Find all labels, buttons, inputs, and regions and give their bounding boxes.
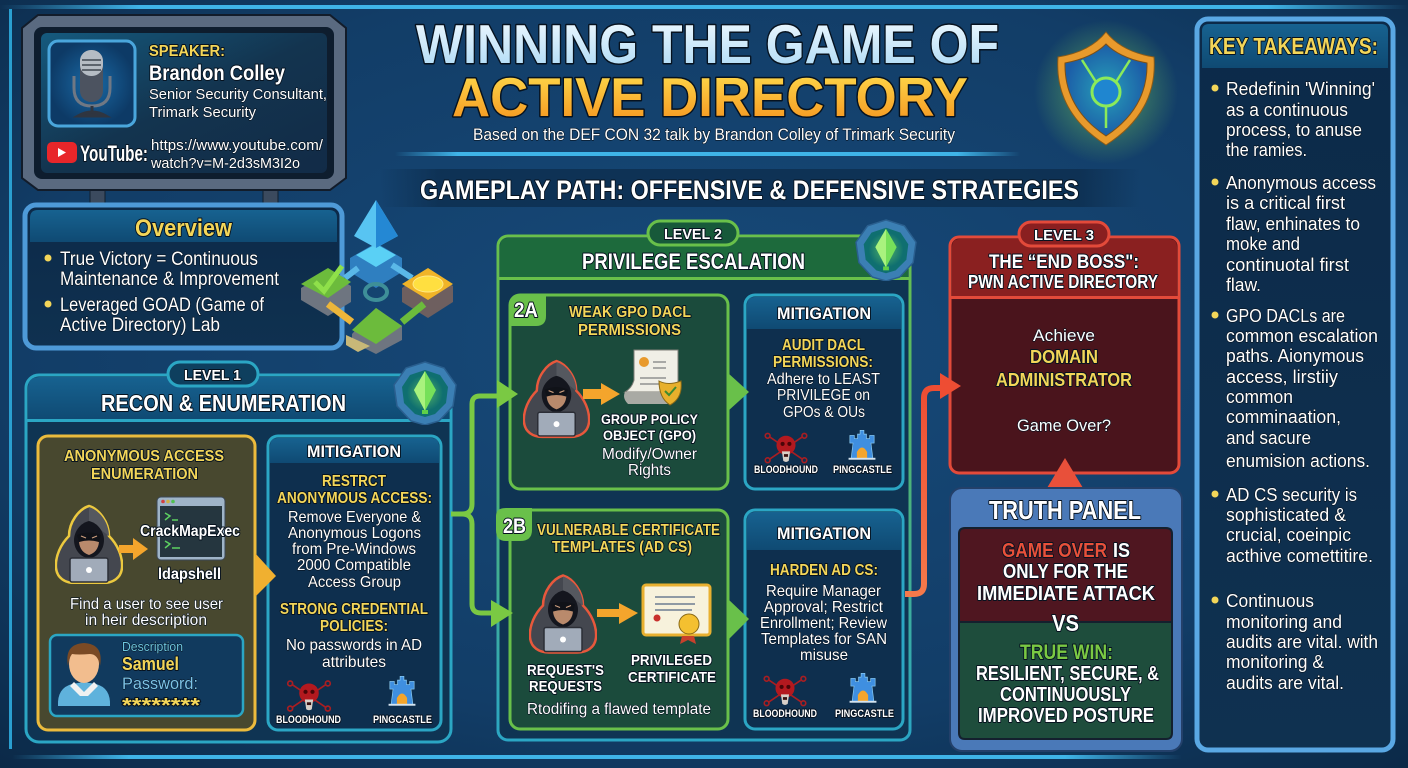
takeaway 2: is a critical first	[1226, 193, 1345, 213]
label: requests	[527, 662, 604, 695]
takeaway 3: common escalation	[1226, 326, 1378, 346]
user card	[50, 635, 243, 717]
card title	[569, 304, 691, 339]
panel: level 3	[950, 222, 1179, 473]
mitigation: harden AD CS	[760, 562, 887, 664]
title: ACTIVE DIRECTORY	[452, 66, 968, 128]
mitigation: audit DACL: PERMISSIONS:	[773, 354, 873, 371]
icon: level 2 badge	[856, 220, 916, 281]
mitigation: restrict access: Anonymous Logons	[288, 525, 421, 542]
takeaway 4: crucial, coeinpic	[1226, 525, 1351, 545]
card: 2A weak GPO DACL	[510, 294, 728, 489]
truth: game over	[959, 528, 1172, 622]
icon: hacker	[56, 506, 122, 583]
mitigation: audit DACL: GPOs & OUs	[783, 404, 865, 421]
panel: level 1	[26, 362, 456, 742]
takeaway 4: sophisticated &	[1226, 505, 1346, 525]
overview bullets: Active Directory) Lab	[60, 315, 220, 336]
youtube url	[150, 137, 324, 172]
level 2 heading: PRIVILEGE ESCALATION	[582, 249, 805, 274]
overview bullets: Leveraged GOAD (Game of	[60, 295, 265, 316]
label: VS: VS	[1052, 610, 1079, 636]
takeaway 3: enumision actions.	[1226, 451, 1370, 471]
icon: bloodhound	[753, 676, 817, 720]
takeaway 5: audits are vital.	[1226, 673, 1344, 693]
icon: pingcastle	[833, 430, 892, 476]
icon: shield	[1034, 20, 1178, 164]
arrow: attack to mitigation	[255, 553, 276, 597]
mitigation: restrict access: Remove Everyone &	[288, 509, 421, 526]
mitigation: credential policies: STRONG CREDENTIAL	[280, 601, 428, 618]
caption: flawed template: Rtodifing a flawed template	[527, 701, 711, 718]
level 3 goal: Achieve	[1033, 326, 1095, 345]
tool label: crackmapexec: CrackMapExec	[140, 523, 240, 540]
level 3 heading: PWN ACTIVE DIRECTORY	[968, 272, 1158, 292]
label: requests: REQUESTS	[529, 678, 602, 695]
arrow: 2A to mitigation	[728, 373, 749, 411]
takeaway 2: Anonymous access	[1226, 173, 1376, 193]
icon: bloodhound	[754, 433, 818, 476]
mitigation: credential policies: No passwords in AD	[286, 637, 422, 654]
heading: key takeaways: KEY TAKEAWAYS:	[1209, 33, 1378, 59]
GPO label: GROUP POLICY	[601, 411, 699, 427]
mitigation: harden AD CS: misuse	[800, 647, 848, 664]
card title: ANONYMOUS ACCESS	[64, 448, 224, 465]
mitigation: credential policies	[280, 601, 428, 671]
tab: 2A: 2A	[514, 299, 538, 322]
takeaway 2: continuotal first	[1226, 255, 1349, 275]
takeaway 1	[1212, 79, 1375, 160]
user card: ********	[122, 695, 200, 717]
overview bullets: True Victory = Continuous	[60, 249, 258, 270]
icon: user	[58, 643, 110, 706]
label: privileged certificate	[628, 652, 716, 686]
icon: GPO scroll	[624, 350, 681, 405]
overview bullets	[44, 249, 280, 336]
takeaway 3: GPO DACLs are	[1226, 306, 1345, 326]
takeaway 3: common	[1226, 387, 1293, 407]
user card: Description	[122, 639, 183, 654]
icon: youtube	[47, 141, 148, 166]
level 3 heading	[968, 252, 1158, 292]
truth: true win: IMPROVED POSTURE	[978, 705, 1154, 727]
mitigation: audit DACL: Adhere to LEAST	[767, 371, 880, 388]
GPO label: Modify/Owner	[602, 446, 698, 463]
mitigation: restrict access: ANONYMOUS ACCESS:	[277, 490, 432, 507]
GPO label: OBJECT (GPO)	[603, 427, 696, 443]
level 2 pill: LEVEL 2	[664, 226, 722, 243]
takeaway 3: access, lirstiiy	[1226, 367, 1338, 387]
youtube url: https://www.youtube.com/	[151, 137, 324, 154]
takeaway 3	[1212, 306, 1378, 471]
mitigation: credential policies: attributes	[322, 654, 386, 671]
mitigation: restrict access: Access Group	[308, 574, 401, 591]
truth: game over: GAME OVER	[1002, 540, 1107, 562]
icon: terminal	[157, 497, 225, 560]
truth: true win: TRUE WIN:	[1020, 641, 1113, 664]
panel: 2A mitigation	[745, 295, 903, 489]
label: privileged certificate: CERTIFICATE	[628, 669, 716, 686]
card title	[537, 522, 720, 556]
description text: in heir description	[85, 612, 207, 629]
card title: PERMISSIONS	[578, 322, 681, 339]
icon: bloodhound: BLOODHOUND	[276, 714, 341, 726]
truth: game over: ONLY FOR THE	[1003, 561, 1128, 583]
subtitle: Based on the DEF CON 32 talk by Brandon Colley of Trimark Security	[473, 125, 955, 144]
arrow: truth panel up to level 3	[1047, 458, 1083, 488]
takeaway 4: AD CS security is	[1226, 485, 1357, 505]
arrow: hacker to tool	[119, 538, 148, 560]
takeaway 5: monitoring and	[1226, 612, 1342, 632]
takeaway 5	[1212, 591, 1378, 693]
takeaway 3: paths. Aionymous	[1226, 346, 1364, 366]
youtube url: watch?v=M-2d3sM3I2o	[150, 155, 300, 172]
heading: overview: Overview	[135, 215, 232, 242]
tab: 2B: 2B	[503, 515, 526, 538]
description text	[70, 596, 224, 629]
title: WINNING THE GAME OF	[416, 13, 999, 75]
label: privileged certificate: PRIVILEGED	[631, 652, 712, 669]
icon: pingcastle: PINGCASTLE	[833, 464, 892, 476]
heading: mitigation: MITIGATION	[777, 304, 871, 323]
tab: 2B	[496, 508, 532, 541]
takeaway 2	[1212, 173, 1376, 295]
card title: VULNERABLE CERTIFICATE	[537, 522, 720, 539]
icon: bloodhound	[276, 681, 341, 726]
heading: mitigation: MITIGATION	[307, 442, 401, 461]
level 3 heading: THE “END BOSS":	[989, 252, 1139, 273]
mitigation: audit DACL: PRIVILEGE on	[777, 387, 870, 404]
icon: youtube: YouTube:	[80, 141, 148, 166]
speaker name: Brandon Colley	[149, 62, 285, 85]
user card: Samuel	[122, 654, 179, 674]
mitigation: credential policies: POLICIES:	[320, 618, 388, 635]
takeaway 1: Redefinin 'Winning'	[1226, 79, 1375, 99]
icon: certificate	[643, 585, 710, 644]
arrow: 2B to mitigation	[728, 599, 749, 640]
icon: bloodhound: BLOODHOUND	[754, 464, 818, 476]
truth: game over: IS	[1113, 540, 1130, 562]
arrow: hacker to certificate	[597, 603, 638, 624]
takeaway 4: acthive comettitire.	[1226, 546, 1373, 566]
panel: truth panel	[950, 458, 1182, 751]
card title	[64, 448, 224, 483]
truth: true win	[959, 622, 1172, 739]
icon: bloodhound: BLOODHOUND	[753, 708, 817, 720]
takeaway 5: monitoring &	[1226, 652, 1324, 672]
mitigation: harden AD CS: Enrollment; Review	[760, 615, 887, 632]
card title: ENUMERATION	[91, 466, 198, 483]
takeaway 5: audits are vital. with	[1226, 632, 1378, 652]
panel: key takeaways	[1197, 19, 1393, 750]
overview bullets: Maintenance & Improvement	[60, 269, 280, 290]
level 2 pill	[648, 221, 738, 245]
card: 2B vulnerable certificate templates	[496, 508, 728, 729]
takeaway 4	[1212, 485, 1373, 566]
section heading: gameplay path: GAMEPLAY PATH: OFFENSIVE & DEFENSIVE STRATEGIES	[420, 175, 1079, 205]
label: requests: REQUEST'S	[527, 662, 604, 679]
GPO label: Rights	[628, 462, 671, 479]
tool label: ldapshell: ldapshell	[158, 566, 221, 583]
icon: isometric game board	[301, 200, 453, 354]
icon: pingcastle	[835, 673, 894, 720]
mitigation: restrict access: from Pre-Windows	[292, 541, 416, 558]
mitigation: harden AD CS: Approval; Restrict	[764, 599, 884, 616]
description text: Find a user to see user	[70, 596, 224, 613]
arrow: hacker to GPO	[583, 383, 620, 405]
level 3 pill	[1019, 222, 1109, 246]
icon: hacker	[524, 361, 589, 437]
takeaway 2: moke and	[1226, 234, 1300, 254]
takeaway 3: and sacure	[1226, 428, 1311, 448]
mitigation: restrict access	[277, 473, 432, 591]
user card: Password:	[122, 674, 198, 693]
arrow: level 1 to level 2 branches	[451, 380, 518, 627]
icon: hacker	[530, 576, 596, 652]
mitigation: harden AD CS: Templates for SAN	[761, 631, 887, 648]
panel: level 2	[496, 220, 916, 740]
arrow: level 2 to level 3	[905, 373, 961, 594]
speaker role	[149, 86, 327, 121]
truth: game over: IMMEDIATE ATTACK	[977, 583, 1155, 605]
truth: true win: RESILIENT, SECURE, &	[976, 663, 1159, 685]
speaker role: Senior Security Consultant,	[149, 86, 327, 103]
icon: microphone	[49, 41, 135, 126]
mitigation: restrict access: 2000 Compatible	[297, 557, 411, 574]
card title: WEAK GPO DACL	[569, 304, 691, 321]
level 3 goal: Game Over?	[1017, 416, 1111, 435]
icon: pingcastle: PINGCASTLE	[373, 714, 432, 726]
panel: 2B mitigation	[745, 510, 903, 729]
takeaway 5: Continuous	[1226, 591, 1314, 611]
mitigation: audit DACL: AUDIT DACL	[782, 337, 865, 354]
icon: pingcastle	[373, 676, 432, 726]
card: anonymous access enumeration	[38, 436, 255, 730]
level 1 pill: LEVEL 1	[184, 367, 241, 384]
level 1 heading: RECON & ENUMERATION	[101, 390, 346, 416]
tab: 2A	[510, 294, 546, 326]
takeaway 2: flaw.	[1226, 275, 1261, 295]
mitigation: restrict access: RESTRCT	[322, 473, 386, 490]
GPO label	[601, 411, 699, 479]
speaker role: Trimark Security	[149, 104, 256, 121]
takeaway 2: flaw, enhinates to	[1226, 214, 1360, 234]
divider	[395, 152, 1020, 156]
icon: pingcastle: PINGCASTLE	[835, 708, 894, 720]
panel: overview	[25, 205, 342, 348]
truth: true win: CONTINUOUSLY	[1000, 684, 1132, 706]
takeaway 1: process, to anuse	[1226, 120, 1362, 140]
level 1 pill	[168, 362, 258, 386]
speaker board	[22, 15, 346, 204]
panel: level 1 mitigation	[268, 436, 441, 730]
takeaway 3: comminaation,	[1226, 407, 1341, 427]
mitigation: harden AD CS: Require Manager	[766, 583, 882, 600]
level 3 goal: DOMAIN	[1030, 347, 1098, 367]
mitigation: audit DACL	[767, 337, 880, 421]
level 3 pill: LEVEL 3	[1034, 227, 1094, 244]
icon: level 1 badge	[394, 362, 456, 425]
heading: mitigation: MITIGATION	[777, 524, 871, 543]
title	[416, 13, 999, 128]
level 3 goal: ADMINISTRATOR	[996, 370, 1132, 390]
heading: truth panel: TRUTH PANEL	[989, 495, 1141, 525]
level 3 goal	[996, 326, 1132, 435]
takeaway 1: the ramies.	[1226, 140, 1307, 160]
mitigation: harden AD CS: HARDEN AD CS:	[770, 562, 878, 579]
speaker label: SPEAKER:	[149, 43, 225, 60]
card title: TEMPLATES (AD CS)	[552, 539, 692, 556]
takeaway 1: as a continuous	[1226, 100, 1348, 120]
